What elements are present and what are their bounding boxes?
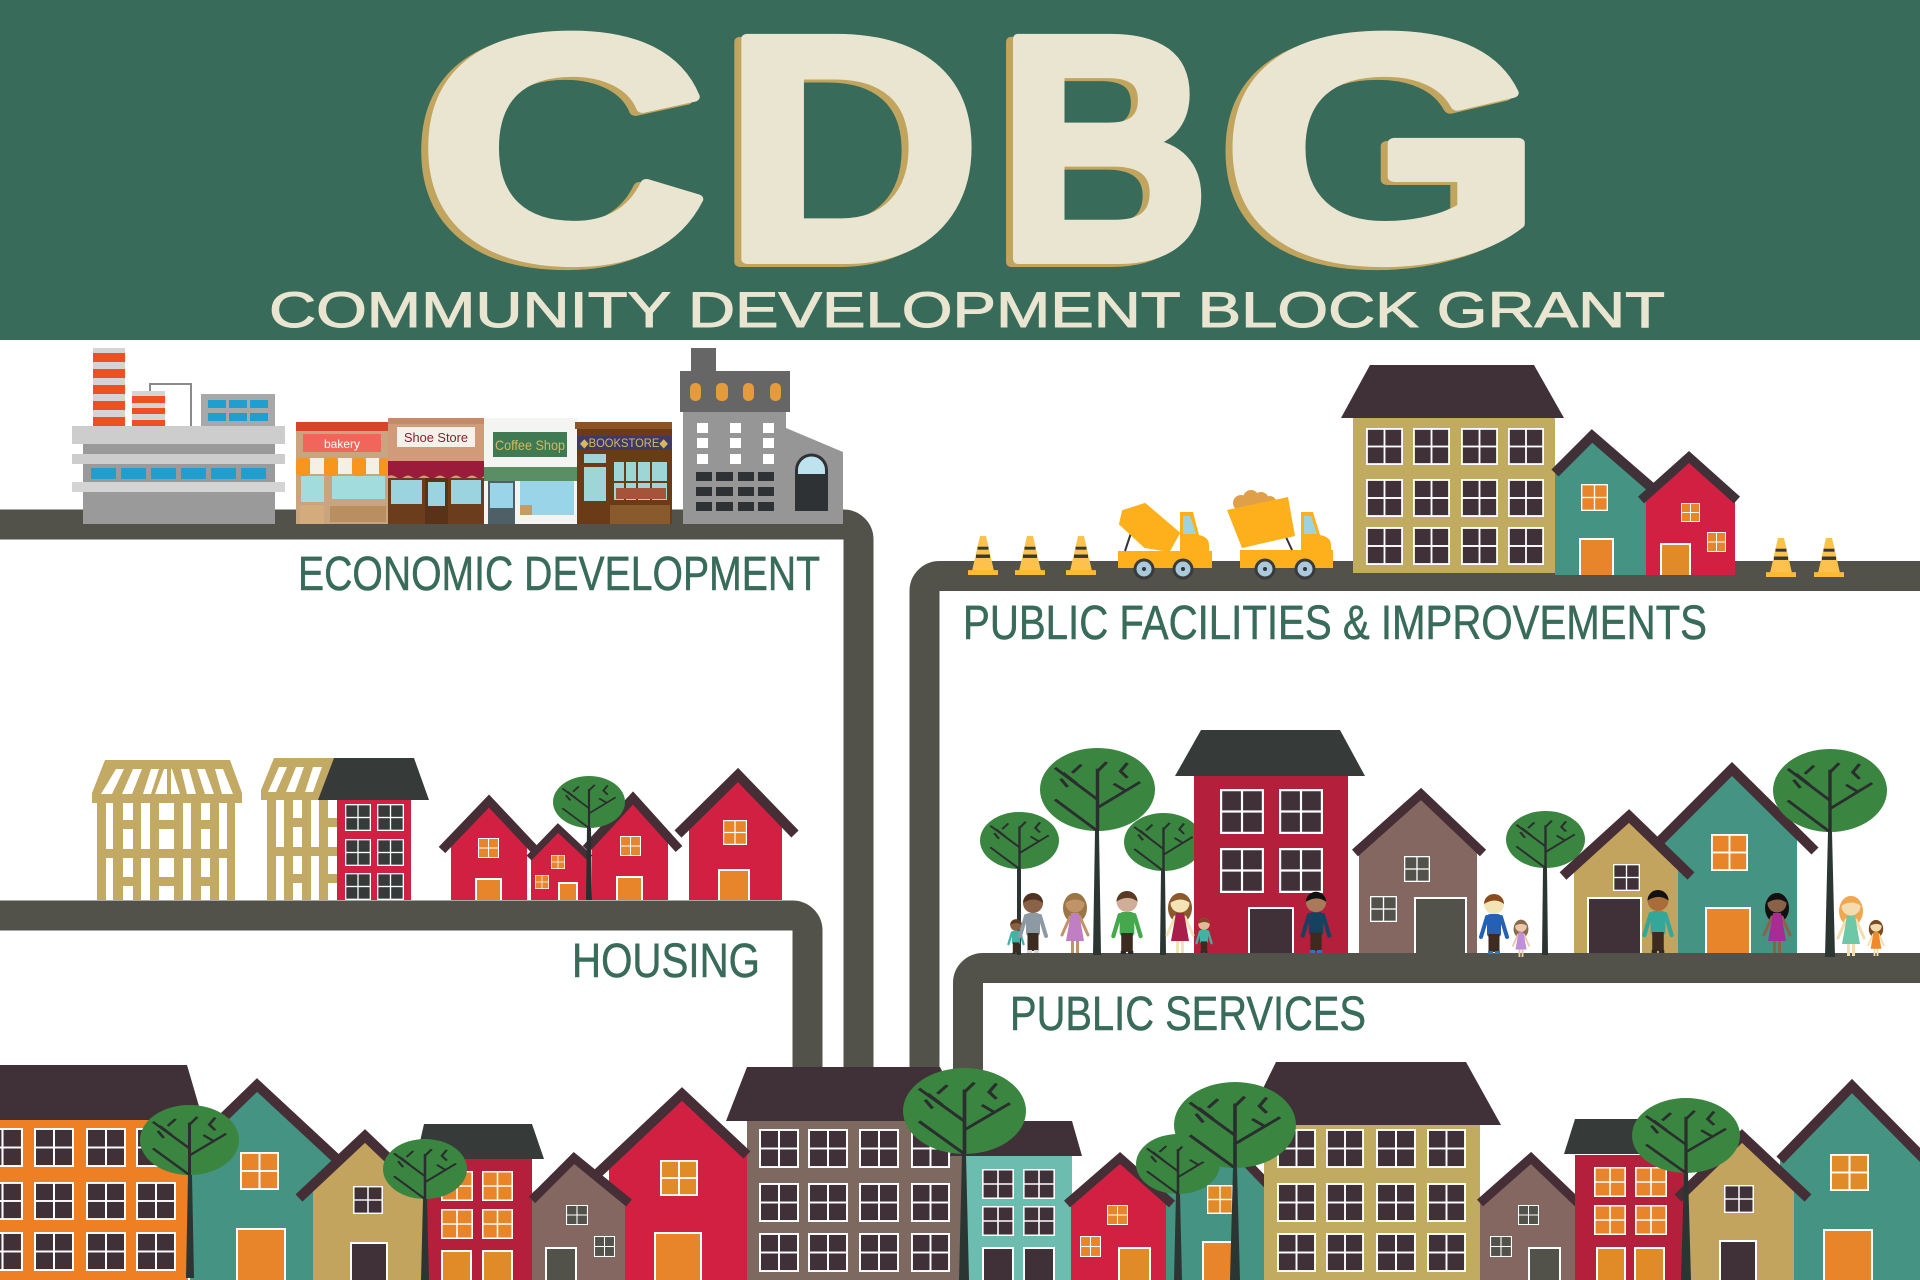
bottom row: small brown house	[532, 1158, 629, 1280]
tan house: services	[1563, 816, 1691, 953]
cones left	[968, 536, 1096, 575]
header banner	[0, 0, 1920, 340]
tree: services middle	[1506, 811, 1585, 955]
gray office building	[680, 348, 843, 524]
trees: services	[980, 748, 1203, 955]
roads	[0, 524, 1920, 1200]
heading: housing: HOUSING	[572, 935, 760, 988]
title: CDBG	[418, 0, 1544, 327]
bottom row: orange apartment	[0, 1065, 203, 1280]
storefront: bookstore: ◆BOOKSTORE◆	[580, 436, 669, 450]
cement mixer truck two	[1227, 490, 1333, 580]
cement mixer truck one	[1118, 504, 1212, 580]
heading: public services: PUBLIC SERVICES	[1010, 988, 1366, 1041]
teal house: services	[1658, 769, 1815, 953]
bottom row: red apartment	[416, 1124, 544, 1280]
tree: services right	[1773, 749, 1887, 957]
bottom row: teal house	[190, 1085, 340, 1280]
cones right	[1766, 538, 1844, 577]
apartment: facilities	[1341, 365, 1564, 573]
bottom row: tan apartment	[1245, 1062, 1501, 1280]
brown house: services	[1355, 794, 1483, 953]
storefront: coffee shop	[484, 418, 578, 524]
factory	[72, 348, 285, 524]
bottom row trees	[140, 1068, 1740, 1280]
bottom row: right teal house	[1780, 1086, 1920, 1280]
bottom row: big red house	[596, 1094, 747, 1280]
people	[1008, 890, 1884, 957]
bottom row: brown apartment	[726, 1067, 967, 1280]
red house: facilities	[1641, 457, 1737, 575]
teal house: facilities	[1555, 436, 1652, 575]
housing: half-built apartment	[261, 758, 429, 900]
housing: red houses	[442, 775, 795, 900]
bottom row: small red house	[1067, 1158, 1172, 1280]
storefront: shoe store: Shoe Store	[404, 430, 468, 445]
storefront: coffee shop: Coffee Shop	[495, 437, 565, 453]
housing: building frame one	[92, 760, 242, 900]
storefront: bookstore	[575, 422, 672, 524]
bottom row: right red apartment	[1564, 1119, 1690, 1280]
storefront: bakery: bakery	[324, 437, 360, 451]
bottom row: right brown house	[1480, 1158, 1580, 1280]
subtitle: COMMUNITY DEVELOPMENT BLOCK GRANT	[269, 282, 1665, 338]
bottom row: tan house	[299, 1136, 430, 1280]
red apartment: services	[1175, 730, 1365, 953]
bottom row: right tan house	[1678, 1136, 1808, 1280]
heading: economic development: ECONOMIC DEVELOPMENT	[298, 548, 820, 601]
tree: housing	[553, 776, 625, 900]
storefront: bakery	[296, 422, 389, 524]
heading: public facilities and improvements: PUBLIC FACILITIES & IMPROVEMENTS	[963, 597, 1707, 650]
bottom row: light teal apartment	[950, 1121, 1082, 1280]
bottom row: teal house behind trees	[1166, 1130, 1268, 1280]
storefront: shoe store	[388, 418, 485, 524]
